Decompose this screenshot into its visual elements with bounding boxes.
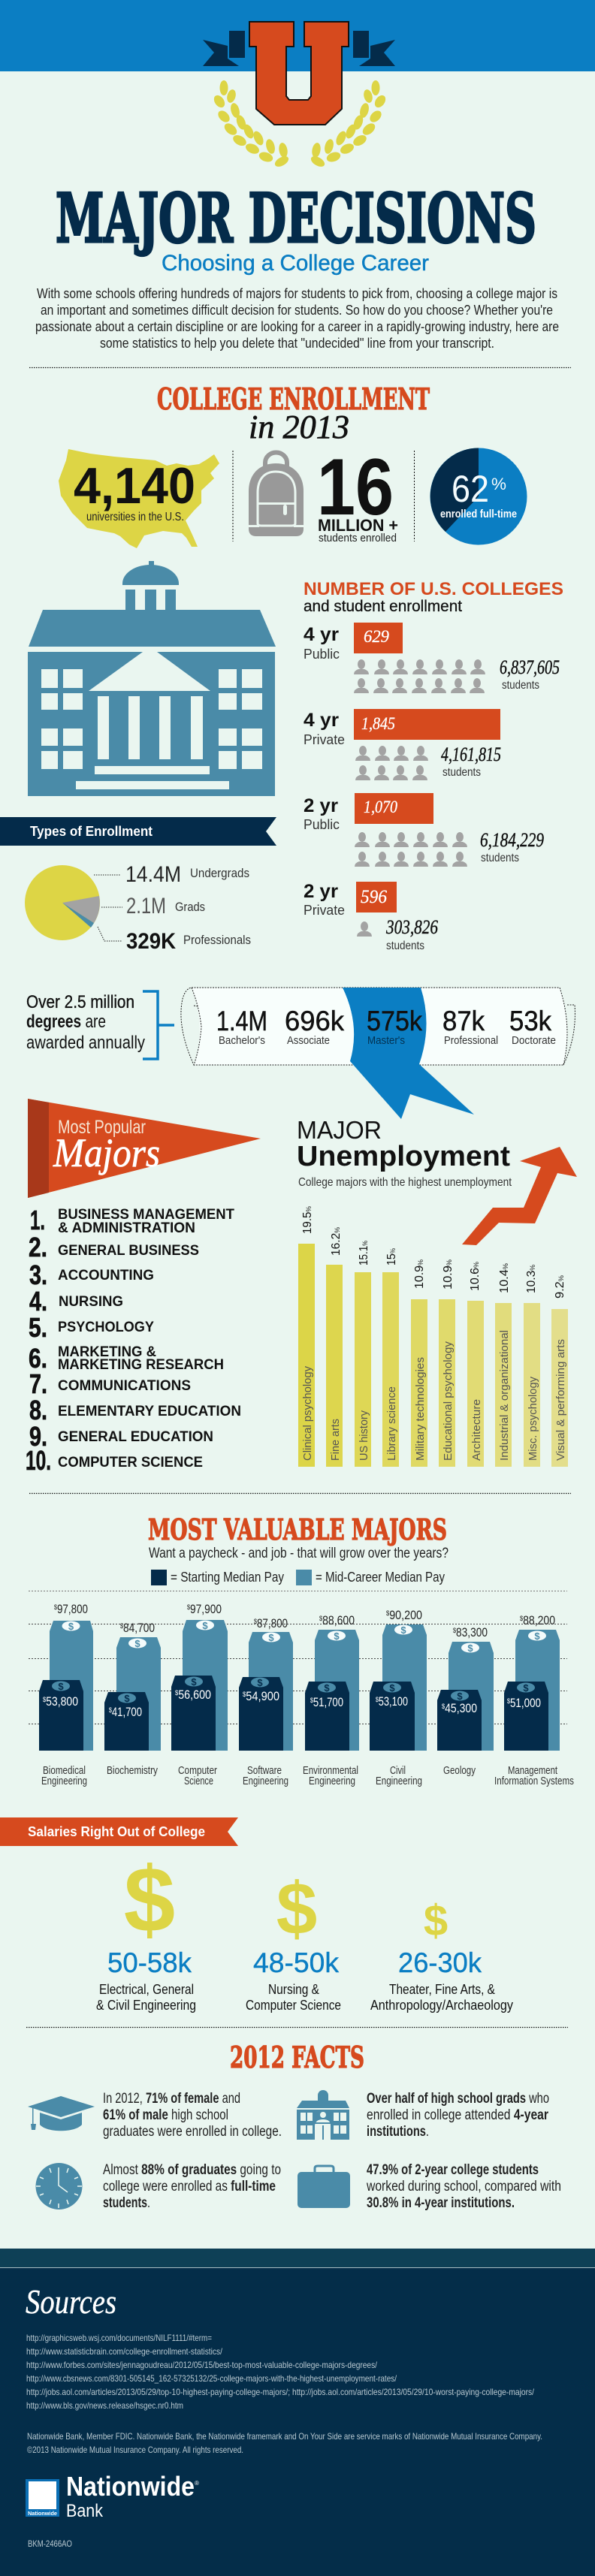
- bar chart: unemployment by major: Fine arts: [329, 1419, 342, 1461]
- mid-career values: 88,200: [523, 1613, 555, 1627]
- item 4: NURSING: [59, 1294, 123, 1310]
- value: 4,140: [74, 457, 195, 514]
- row: 2 yr public: 2 yr: [304, 795, 338, 816]
- fact: enrollment by gender: In 2012, 71% of female and: [103, 2091, 240, 2107]
- stat: enrolled full-time pie: enrolled full-time: [440, 508, 517, 520]
- fact: full-time students: students.: [103, 2195, 150, 2211]
- bar chart: unemployment by major: 10.9%: [442, 1259, 455, 1290]
- starting bars: [39, 1676, 548, 1751]
- diploma with degree counts: Professional: [444, 1034, 498, 1047]
- item 6: MARKETING RESEARCH: [58, 1357, 224, 1373]
- value: 16: [317, 442, 394, 532]
- wreath: [212, 80, 388, 169]
- major names: Computer: [178, 1764, 217, 1777]
- diploma with degree counts: Associate: [287, 1034, 330, 1047]
- stat: students enrolled: [249, 442, 398, 544]
- chart: pay by major: $: [268, 1632, 274, 1643]
- major names: Software: [247, 1764, 282, 1777]
- item 4: 4.: [29, 1286, 47, 1317]
- chart: pay by major: $: [389, 1682, 395, 1694]
- starting values: 53,800: [46, 1694, 78, 1709]
- bar chart: unemployment by major: Misc. psychology: [527, 1377, 539, 1461]
- bar chart: unemployment by major: Military technologies: [414, 1357, 427, 1461]
- chart: enrollment pie: Grads: [175, 900, 205, 914]
- arrow: rising unemployment: [462, 1147, 577, 1245]
- logo: Nationwide Bank: Nationwide: [28, 2511, 57, 2517]
- icon: college building: [28, 561, 276, 796]
- chart: pay by major: $: [257, 1677, 263, 1688]
- stat: enrolled full-time pie: 62: [452, 468, 489, 510]
- major names: Civil: [390, 1764, 406, 1777]
- row: 2 yr public: Public: [304, 817, 340, 832]
- row: 4 yr public: students: [502, 679, 539, 692]
- salary: arts: [370, 1896, 513, 2013]
- legal text: [27, 2431, 542, 2455]
- item 3: [29, 1259, 154, 1290]
- bar chart: unemployment by major: Architecture: [470, 1399, 483, 1461]
- pennant: most popular majors: [28, 1099, 261, 1198]
- diploma with degree counts: Master's: [367, 1034, 405, 1047]
- starting values: $: [310, 1697, 313, 1704]
- heading: 2012 facts: 2012 FACTS: [230, 2041, 364, 2075]
- ribbon: [343, 988, 474, 1119]
- banner: types of enrollment: Types of Enrollment: [30, 824, 153, 839]
- item 3: 3.: [29, 1259, 47, 1290]
- mid-career values: 87,800: [257, 1616, 288, 1630]
- stat: enrolled full-time pie: [430, 448, 527, 545]
- code: BKM-2466AO: [28, 2538, 72, 2549]
- heading: major unemployment: Unemployment: [297, 1141, 510, 1172]
- mid-career values: $: [120, 1622, 123, 1630]
- chart: pay by major: $: [324, 1682, 330, 1694]
- row: 4 yr private: [304, 709, 501, 780]
- row: 2 yr private: [304, 881, 438, 952]
- salary: arts: Anthropology/Archaeology: [370, 1998, 513, 2013]
- salary: nursing: Nursing &: [268, 1982, 319, 1997]
- row: 2 yr public: 6,184,229: [480, 829, 544, 851]
- stat: enrolled full-time pie: %: [491, 475, 506, 493]
- letter U: [249, 22, 349, 125]
- banner: types of enrollment: [0, 817, 276, 846]
- item 2: 2.: [29, 1232, 47, 1262]
- salary: engineering: 50-58k: [107, 1947, 192, 1978]
- item 2: GENERAL BUSINESS: [58, 1243, 199, 1259]
- bar chart: unemployment by major: Educational psychology: [442, 1341, 455, 1461]
- item 6: [29, 1343, 224, 1374]
- item 1: [30, 1205, 234, 1236]
- chart: enrollment pie: [25, 862, 251, 954]
- bar chart: unemployment by major: Library science: [385, 1386, 398, 1461]
- chart: pay by major: $: [58, 1681, 64, 1692]
- fact: four-year institutions: enrolled in college attended 4-year: [367, 2107, 548, 2123]
- major names: Biochemistry: [107, 1764, 158, 1777]
- starting values: 51,700: [313, 1695, 343, 1709]
- major names: Engineering: [41, 1775, 87, 1787]
- row: 4 yr private: 4,161,815: [441, 744, 501, 765]
- mid-career values: 84,700: [123, 1621, 155, 1635]
- footer panel: [0, 2249, 595, 2576]
- banner: salaries right out of college: Salaries Right Out of College: [28, 1824, 205, 1839]
- bar chart: unemployment by major: 9.2%: [554, 1275, 566, 1299]
- row: 4 yr public: [304, 623, 560, 693]
- mid-career values: 90,200: [389, 1608, 422, 1622]
- salary: engineering: $: [124, 1849, 175, 1952]
- bar chart: unemployment by major: Industrial & organizational: [498, 1330, 511, 1461]
- heading: major unemployment: [297, 1116, 512, 1189]
- salary: arts: Theater, Fine Arts, &: [389, 1982, 495, 1997]
- bar chart: unemployment by major: 10.4%: [498, 1263, 511, 1293]
- legal text: ©2013 Nationwide Mutual Insurance Company. All rights reserved.: [27, 2445, 243, 2455]
- row: 4 yr public: 6,837,605: [500, 656, 560, 678]
- heading: number of colleges: NUMBER OF U.S. COLLEGES: [304, 579, 563, 599]
- diploma with degree counts: 696k: [285, 1006, 344, 1036]
- chart: pay by major: $: [334, 1630, 340, 1642]
- chart: enrollment pie: 2.1M: [126, 894, 166, 918]
- list: most popular majors: [26, 1205, 241, 1476]
- fact: working students: 30.8% in 4-year institutions.: [367, 2195, 515, 2211]
- diploma with degree counts: 87k: [442, 1006, 485, 1036]
- callout: degrees awarded: degrees are: [26, 1012, 106, 1032]
- salary: engineering: [96, 1849, 196, 2013]
- item 4: [29, 1286, 123, 1317]
- icon: briefcase: [298, 2166, 350, 2208]
- salary: engineering: & Civil Engineering: [96, 1998, 196, 2013]
- major names: Engineering: [243, 1775, 288, 1787]
- emblem: ribbon, U and wreath: [203, 22, 395, 169]
- row: 4 yr private: students: [442, 766, 481, 779]
- salary: arts: 26-30k: [398, 1947, 482, 1978]
- legend: [151, 1569, 445, 1585]
- item 9: [29, 1421, 213, 1452]
- bar chart: unemployment by major: [298, 1206, 568, 1467]
- starting values: 53,100: [379, 1694, 408, 1709]
- item 5: PSYCHOLOGY: [58, 1320, 154, 1335]
- salary: nursing: 48-50k: [253, 1947, 339, 1978]
- starting values: $: [376, 1696, 379, 1703]
- chart: enrollment pie: Undergrads: [190, 866, 249, 880]
- salary: nursing: Computer Science: [246, 1998, 341, 2013]
- starting values: $: [109, 1706, 112, 1714]
- item 9: 9.: [29, 1421, 47, 1452]
- subtitle: Choosing a College Career: [162, 251, 429, 276]
- logo: Nationwide Bank: ®: [195, 2480, 199, 2487]
- item 1: 1.: [30, 1205, 45, 1235]
- mid-career values: $: [453, 1627, 456, 1634]
- major names: Environmental: [303, 1764, 358, 1777]
- legend: = Starting Median Pay: [171, 1569, 285, 1585]
- chart: pay by major: $: [191, 1676, 197, 1688]
- salary: engineering: Electrical, General: [99, 1982, 194, 1997]
- item 6: MARKETING &: [58, 1344, 156, 1360]
- bar chart: unemployment by major: 15%: [385, 1248, 398, 1265]
- pennant: most popular majors: Most Popular: [58, 1117, 146, 1138]
- diploma with degree counts: Bachelor's: [219, 1034, 265, 1047]
- item 1: & ADMINISTRATION: [58, 1220, 195, 1236]
- callout: degrees awarded: [26, 991, 174, 1059]
- heading: major unemployment: College majors with the highest unemployment: [298, 1176, 512, 1189]
- chart: pay by major: $: [134, 1638, 140, 1649]
- chart: pay by major: $: [534, 1630, 540, 1642]
- row: 2 yr public: students: [481, 852, 519, 864]
- logo: Nationwide Bank: Nationwide: [66, 2471, 195, 2502]
- intro paragraph: [35, 286, 559, 351]
- item 8: 8.: [29, 1395, 47, 1425]
- heading: most valuable majors: MOST VALUABLE MAJORS: [148, 1513, 447, 1546]
- item 3: ACCOUNTING: [58, 1268, 154, 1283]
- fact: enrollment by gender: [28, 2091, 282, 2140]
- major names: [41, 1764, 574, 1787]
- icon: graduation cap: [28, 2096, 95, 2131]
- subheading: Want a paycheck - and job - that will grow over the years?: [149, 1546, 449, 1561]
- dollar ovals: [62, 1621, 546, 1652]
- caption: students enrolled: [319, 532, 397, 544]
- item 5: 5.: [29, 1312, 47, 1343]
- major names: Management: [508, 1764, 558, 1777]
- mid-career values: 97,800: [57, 1602, 88, 1616]
- item 7: [29, 1368, 191, 1399]
- mid-career bars: [50, 1620, 560, 1751]
- mid-career values: $: [319, 1615, 322, 1622]
- chart: pay by major: $: [523, 1682, 529, 1694]
- item 6: 6.: [29, 1343, 47, 1374]
- source links: http://www.cbsnews.com/8301-505145_162-57325132/25-college-majors-with-the-highest-unemployment-rates/: [26, 2373, 397, 2384]
- row: 4 yr private: 4 yr: [304, 710, 339, 731]
- chart: pay by major: $: [400, 1624, 406, 1636]
- fact: enrollment by gender: graduates were enrolled in college.: [103, 2124, 282, 2140]
- row: 4 yr public: 629: [364, 627, 389, 646]
- salary: nursing: $: [276, 1867, 317, 1950]
- row: 2 yr private: 303,826: [385, 916, 438, 938]
- unit: MILLION +: [318, 516, 398, 535]
- chart: pay by major: $: [457, 1691, 463, 1702]
- bar chart: unemployment by major: 10.3%: [525, 1265, 538, 1293]
- callout: degrees awarded: Over 2.5 million: [26, 992, 134, 1012]
- bar chart: unemployment by major: 10.6%: [469, 1262, 482, 1291]
- item 8: [29, 1395, 241, 1425]
- starting values: 54,900: [246, 1689, 279, 1703]
- row: 2 yr private: students: [386, 940, 424, 952]
- logo: Nationwide Bank: Bank: [66, 2501, 104, 2521]
- heading: in 2013: in 2013: [249, 409, 349, 445]
- bar chart: unemployment by major: 15.1%: [358, 1241, 370, 1265]
- chart: enrollment pie: Professionals: [183, 933, 251, 947]
- diploma with degree counts: 1.4M: [216, 1006, 267, 1036]
- fact: full-time students: Almost 88% of graduates going to: [103, 2162, 281, 2178]
- row: 2 yr private: Private: [304, 903, 345, 918]
- item 9: GENERAL EDUCATION: [58, 1429, 213, 1445]
- bar chart: unemployment by major: 19.5%: [301, 1206, 314, 1234]
- fact: enrollment by gender: 61% of male high school: [103, 2107, 228, 2123]
- major names: Biomedical: [43, 1764, 86, 1777]
- bar chart: unemployment by major: 16.2%: [330, 1227, 343, 1256]
- icon: clock: [36, 2163, 83, 2210]
- row: 4 yr public: 4 yr: [304, 624, 339, 645]
- row: 2 yr private: 2 yr: [304, 881, 338, 902]
- major names: Geology: [443, 1764, 476, 1777]
- mid-career values: $: [187, 1603, 190, 1611]
- row: 4 yr private: 1,845: [361, 714, 395, 733]
- row: 2 yr public: 1,070: [364, 798, 397, 816]
- intro paragraph: some statistics to help you delete that "undecided" line from your transcript.: [100, 336, 494, 351]
- fact: four-year institutions: [297, 2090, 549, 2140]
- chart: pay by major: $: [202, 1620, 208, 1631]
- source links: http://graphicsweb.wsj.com/documents/NILF1111/#term=: [26, 2333, 212, 2343]
- source links: [26, 2333, 535, 2411]
- heading: number of colleges: and student enrollment: [304, 598, 462, 615]
- starting values: 45,300: [445, 1701, 477, 1715]
- mid-career values: 88,600: [322, 1613, 355, 1627]
- starting values: $: [507, 1697, 510, 1705]
- salary: nursing: [246, 1867, 341, 2013]
- starting values: 51,000: [510, 1696, 541, 1710]
- row: 4 yr public: Public: [304, 647, 340, 662]
- row: 2 yr public: [304, 793, 544, 867]
- bar chart: unemployment by major: Visual & performing arts: [554, 1339, 567, 1461]
- header blue band: [0, 0, 595, 71]
- source links: http://www.bls.gov/news.release/hsgec.nr0.htm: [26, 2400, 183, 2411]
- fact: working students: [298, 2162, 561, 2211]
- mid-career values: $: [386, 1609, 389, 1617]
- chart: pay by major: $: [124, 1693, 130, 1704]
- chart: pay by major: $: [68, 1621, 74, 1632]
- mid-career values: [54, 1602, 555, 1639]
- item 7: 7.: [29, 1368, 47, 1399]
- fact: full-time students: college were enrolled as full-time: [103, 2179, 276, 2194]
- item 10: 10.: [26, 1445, 51, 1476]
- item 8: ELEMENTARY EDUCATION: [58, 1404, 241, 1419]
- item 7: COMMUNICATIONS: [58, 1378, 191, 1394]
- chart: enrollment pie: 329K: [126, 929, 176, 954]
- diploma with degree counts: 575k: [367, 1006, 422, 1036]
- icon: US map: [59, 449, 219, 548]
- logo: Nationwide Bank: [26, 2471, 199, 2521]
- bar chart: unemployment by major: 10.9%: [413, 1259, 426, 1289]
- starting values: $: [243, 1691, 246, 1698]
- chart: enrollment pie: 14.4M: [125, 862, 181, 887]
- chart: pay by major: $: [467, 1642, 473, 1654]
- major names: Engineering: [376, 1775, 422, 1787]
- bar chart: unemployment by major: Clinical psychology: [301, 1366, 314, 1461]
- fact: four-year institutions: Over half of high school grads who: [367, 2091, 549, 2107]
- mid-career values: $: [54, 1603, 57, 1611]
- banner: salaries right out of college: [0, 1817, 238, 1846]
- ribbon: [203, 31, 395, 66]
- diploma with degree counts: Doctorate: [512, 1034, 556, 1047]
- row: 4 yr private: Private: [304, 732, 345, 747]
- stat: universities map: [59, 449, 219, 548]
- bar chart: unemployment by major: US history: [358, 1410, 370, 1461]
- caption: universities in the U.S.: [86, 511, 184, 523]
- item 10: [26, 1445, 203, 1476]
- item 10: COMPUTER SCIENCE: [58, 1455, 203, 1470]
- starting values: $: [442, 1703, 445, 1710]
- icon: backpack: [249, 453, 304, 536]
- salary: arts: $: [424, 1896, 448, 1945]
- heading: sources: Sources: [26, 2282, 116, 2321]
- item 5: [29, 1312, 154, 1343]
- starting values: [43, 1688, 541, 1719]
- chart: pay by major: [39, 1602, 574, 1787]
- icon: school building: [297, 2090, 349, 2140]
- mid-career values: $: [254, 1618, 257, 1625]
- source links: http://www.forbes.com/sites/jennagoudreau/2012/05/15/best-top-most-valuable-college-majors-degrees/: [26, 2360, 378, 2370]
- heading: college enrollment: COLLEGE ENROLLMENT: [157, 382, 430, 417]
- diploma with degree counts: 53k: [509, 1006, 551, 1036]
- major names: Science: [184, 1775, 213, 1787]
- starting values: 56,600: [178, 1688, 211, 1702]
- mid-career values: $: [520, 1615, 523, 1622]
- heading: major unemployment: MAJOR: [297, 1116, 382, 1144]
- major names: Engineering: [309, 1775, 355, 1787]
- pennant: most popular majors: Majors: [53, 1130, 160, 1175]
- source links: http://www.statisticbrain.com/college-enrollment-statistics/: [26, 2346, 223, 2357]
- fact: working students: 47.9% of 2-year college students: [367, 2162, 539, 2178]
- item 2: [29, 1232, 199, 1262]
- mid-career values: 83,300: [456, 1625, 488, 1639]
- legend: = Mid-Career Median Pay: [316, 1569, 445, 1585]
- diploma with degree counts: [181, 988, 575, 1119]
- fact: four-year institutions: institutions.: [367, 2124, 429, 2140]
- heading: number of colleges: [304, 579, 563, 615]
- starting values: $: [175, 1689, 178, 1697]
- callout: degrees awarded: awarded annually: [26, 1033, 145, 1053]
- fact: full-time students: [36, 2162, 281, 2211]
- starting values: 41,700: [112, 1705, 142, 1719]
- mid-career values: 97,900: [190, 1602, 222, 1616]
- item 1: BUSINESS MANAGEMENT: [58, 1207, 234, 1223]
- row: 2 yr private: 596: [361, 887, 387, 907]
- starting values: $: [43, 1696, 46, 1703]
- major names: Information Systems: [494, 1775, 574, 1787]
